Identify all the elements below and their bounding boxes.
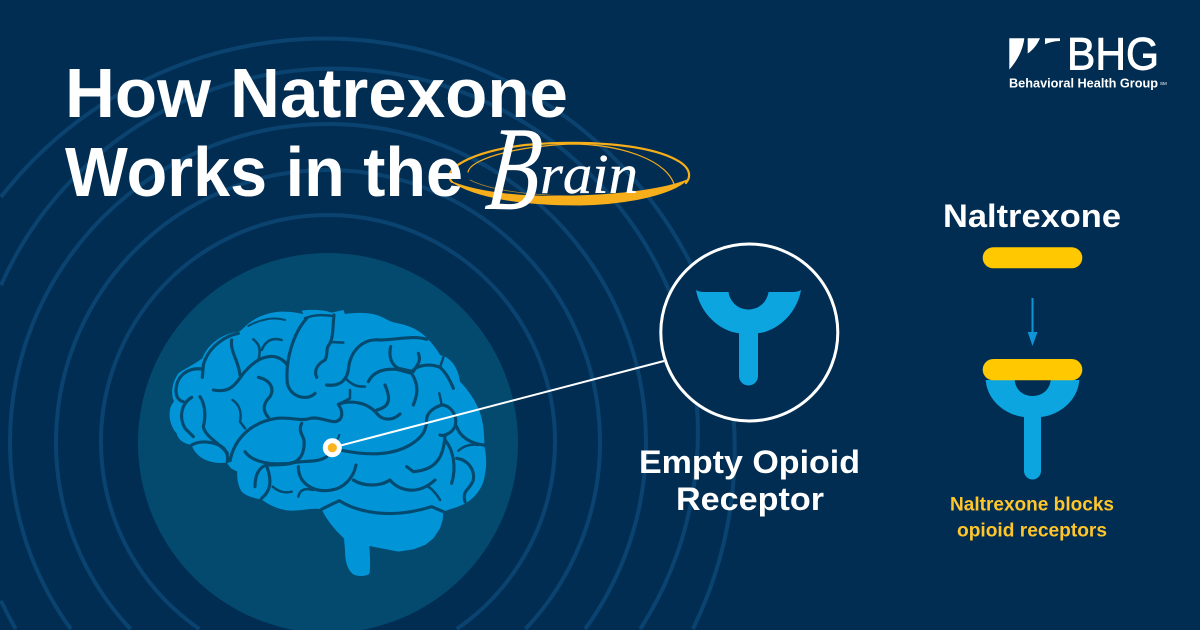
magnifier circle with empty receptor <box>661 244 838 421</box>
title: Works in the <box>65 133 463 211</box>
arrow down <box>1028 298 1038 346</box>
caption: naltrexone blocks opioid receptors: opioid receptors <box>957 520 1107 542</box>
blocked receptor with naltrexone <box>983 359 1082 480</box>
highlighted receptor dot <box>323 438 342 457</box>
label: empty opioid receptor <box>639 444 860 517</box>
service mark: SM <box>1160 81 1167 86</box>
caption: naltrexone blocks opioid receptors: Naltrexone blocks <box>950 494 1114 516</box>
logo: BHG <box>1009 28 1167 91</box>
gold scribble ellipse around Brain <box>449 143 689 205</box>
title: How Natrexone <box>65 54 568 132</box>
script word Brain: B <box>481 102 548 235</box>
heading: Naltrexone: Naltrexone <box>943 198 1121 234</box>
glow disc behind brain <box>138 253 518 630</box>
logo mark <box>1009 38 1060 70</box>
connector line <box>332 361 664 448</box>
label: empty opioid receptor: Empty Opioid <box>639 444 860 480</box>
brain silhouette <box>170 310 486 576</box>
brain illustration <box>170 310 486 576</box>
label: empty opioid receptor: Receptor <box>676 481 824 517</box>
icon: empty receptor <box>696 290 801 386</box>
naltrexone pill <box>983 247 1082 268</box>
brain folds <box>176 315 483 514</box>
logo wordmark: BHG <box>1067 28 1159 79</box>
logo tagline: Behavioral Health Group <box>1009 77 1158 91</box>
caption: naltrexone blocks opioid receptors <box>950 494 1114 542</box>
script word Brain: rain <box>540 144 638 206</box>
title <box>65 54 568 211</box>
script word Brain <box>481 102 638 235</box>
